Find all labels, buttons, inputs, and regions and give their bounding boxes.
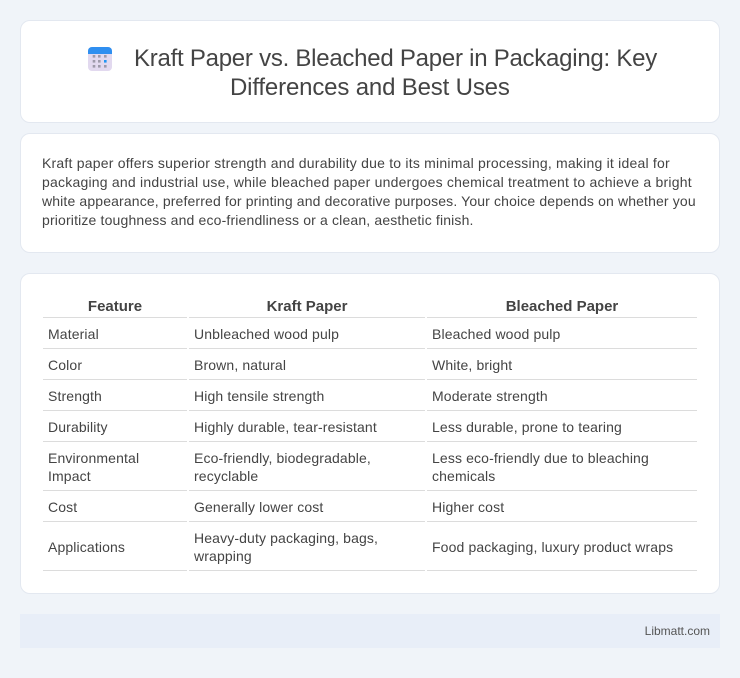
intro text: Kraft paper offers superior strength and durability due to its minimal processing, making it ideal for	[42, 155, 670, 171]
header: Bleached Paper: Bleached Paper	[506, 298, 618, 315]
intro text: packaging and industrial use, while bleached paper undergoes chemical treatment to achieve a bright	[42, 174, 692, 190]
table: Applications	[48, 539, 125, 555]
table: Durability	[48, 419, 108, 435]
table: Bleached wood pulp	[432, 326, 560, 342]
table: Brown, natural	[194, 357, 286, 373]
header: Kraft Paper: Kraft Paper	[267, 298, 347, 315]
table: Color	[48, 357, 82, 373]
table: Unbleached wood pulp	[194, 326, 339, 342]
table: Environmental	[48, 450, 139, 466]
table: wrapping	[194, 548, 252, 564]
intro text	[42, 155, 696, 228]
table: Eco-friendly, biodegradable,	[194, 450, 371, 466]
intro card	[20, 133, 720, 253]
table: White, bright	[432, 357, 512, 373]
table: Generally lower cost	[194, 499, 323, 515]
table: Highly durable, tear-resistant	[194, 419, 377, 435]
table	[43, 298, 697, 571]
table: Higher cost	[432, 499, 504, 515]
table: High tensile strength	[194, 388, 324, 404]
table: Less durable, prone to tearing	[432, 419, 622, 435]
intro text: prioritize toughness and eco-friendliness or a clean, aesthetic finish.	[42, 212, 474, 228]
footer bar	[20, 614, 720, 648]
row: Material: Material	[48, 326, 99, 342]
table: Cost	[48, 499, 77, 515]
intro text: white appearance, preferred for printing and decorative purposes. Your choice depends on whether you	[42, 193, 696, 209]
footer text: Libmatt.com	[645, 624, 710, 638]
table: Food packaging, luxury product wraps	[432, 539, 673, 555]
table: Heavy-duty packaging, bags,	[194, 530, 378, 546]
table: Impact	[48, 468, 91, 484]
table: chemicals	[432, 468, 495, 484]
header card	[20, 20, 720, 123]
table: recyclable	[194, 468, 258, 484]
title	[134, 45, 658, 101]
icon: calendar	[88, 47, 112, 71]
comparison table card	[20, 273, 720, 594]
title: Kraft Paper vs. Bleached Paper in Packaging: Key	[134, 45, 657, 72]
title: Differences and Best Uses	[230, 74, 510, 101]
table: Strength	[48, 388, 102, 404]
header: Feature: Feature	[88, 298, 142, 315]
table: Less eco-friendly due to bleaching	[432, 450, 649, 466]
table: Moderate strength	[432, 388, 548, 404]
